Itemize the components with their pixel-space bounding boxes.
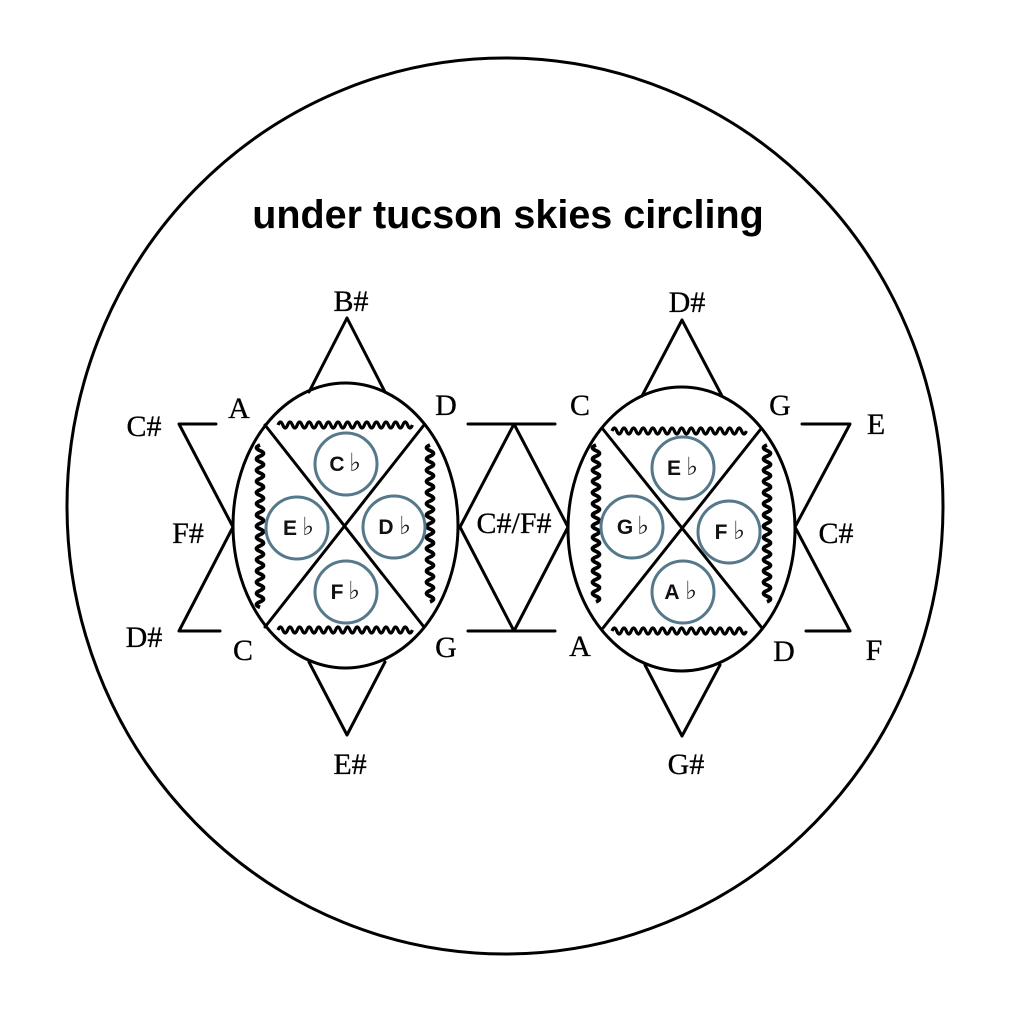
label E: E — [867, 408, 885, 441]
label C#/F#: C#/F# — [476, 507, 552, 540]
key circle: E flat: ♭ — [302, 512, 314, 541]
left oval — [233, 383, 458, 668]
key circle: F flat: F — [715, 521, 728, 544]
key circle: F flat — [698, 501, 760, 563]
key circle: A flat — [652, 561, 714, 623]
left star diagram — [179, 318, 458, 735]
key circle: A flat: A — [664, 581, 680, 604]
key circle: C flat: C — [329, 453, 345, 476]
note labels — [126, 285, 885, 781]
label B#: B# — [333, 285, 369, 318]
key circle: E flat — [652, 437, 714, 499]
label G: G — [769, 389, 791, 422]
right star diagram — [568, 320, 850, 736]
key circle: G flat: G — [617, 516, 633, 539]
key circle: E flat: E — [283, 517, 297, 540]
key circle: E flat: E — [667, 457, 681, 480]
key circle: G flat — [601, 496, 663, 558]
label C: C — [233, 634, 253, 667]
key circle: D flat: D — [378, 516, 394, 539]
key circle: A flat: ♭ — [685, 576, 697, 605]
key circle: F flat — [315, 561, 377, 623]
left oval cross — [265, 425, 424, 627]
key circle: F flat: ♭ — [733, 516, 745, 545]
key circle: C flat — [315, 433, 377, 495]
label F: F — [866, 634, 882, 667]
label D: D — [773, 635, 795, 668]
label A: A — [228, 392, 250, 425]
outer circle — [67, 58, 943, 954]
label C: C — [570, 389, 590, 422]
right oval — [568, 387, 795, 671]
label F#: F# — [172, 517, 204, 550]
key circle: D flat — [363, 496, 425, 558]
label G: G — [435, 631, 457, 664]
label D: D — [435, 389, 457, 422]
label D#: D# — [126, 621, 162, 654]
key circle: F flat: ♭ — [348, 576, 360, 605]
label E#: E# — [333, 748, 367, 781]
key circle: F flat: F — [331, 581, 344, 604]
left star points — [179, 318, 385, 735]
key circle: C flat: ♭ — [349, 448, 361, 477]
label A: A — [569, 630, 591, 663]
label C#: C# — [818, 517, 854, 550]
label C#: C# — [126, 410, 162, 443]
middle star points — [460, 424, 568, 631]
key circle: D flat: ♭ — [399, 511, 411, 540]
key circle: G flat: ♭ — [637, 511, 649, 540]
right oval cross — [602, 428, 762, 628]
key circle: E flat — [266, 497, 328, 559]
key circle: E flat: ♭ — [686, 452, 698, 481]
label D#: D# — [669, 286, 705, 319]
right oval wavy border — [592, 428, 770, 634]
title: under tucson skies circling — [252, 193, 764, 237]
left oval wavy border — [256, 422, 434, 633]
right star points — [642, 320, 850, 736]
label G#: G# — [668, 748, 704, 781]
